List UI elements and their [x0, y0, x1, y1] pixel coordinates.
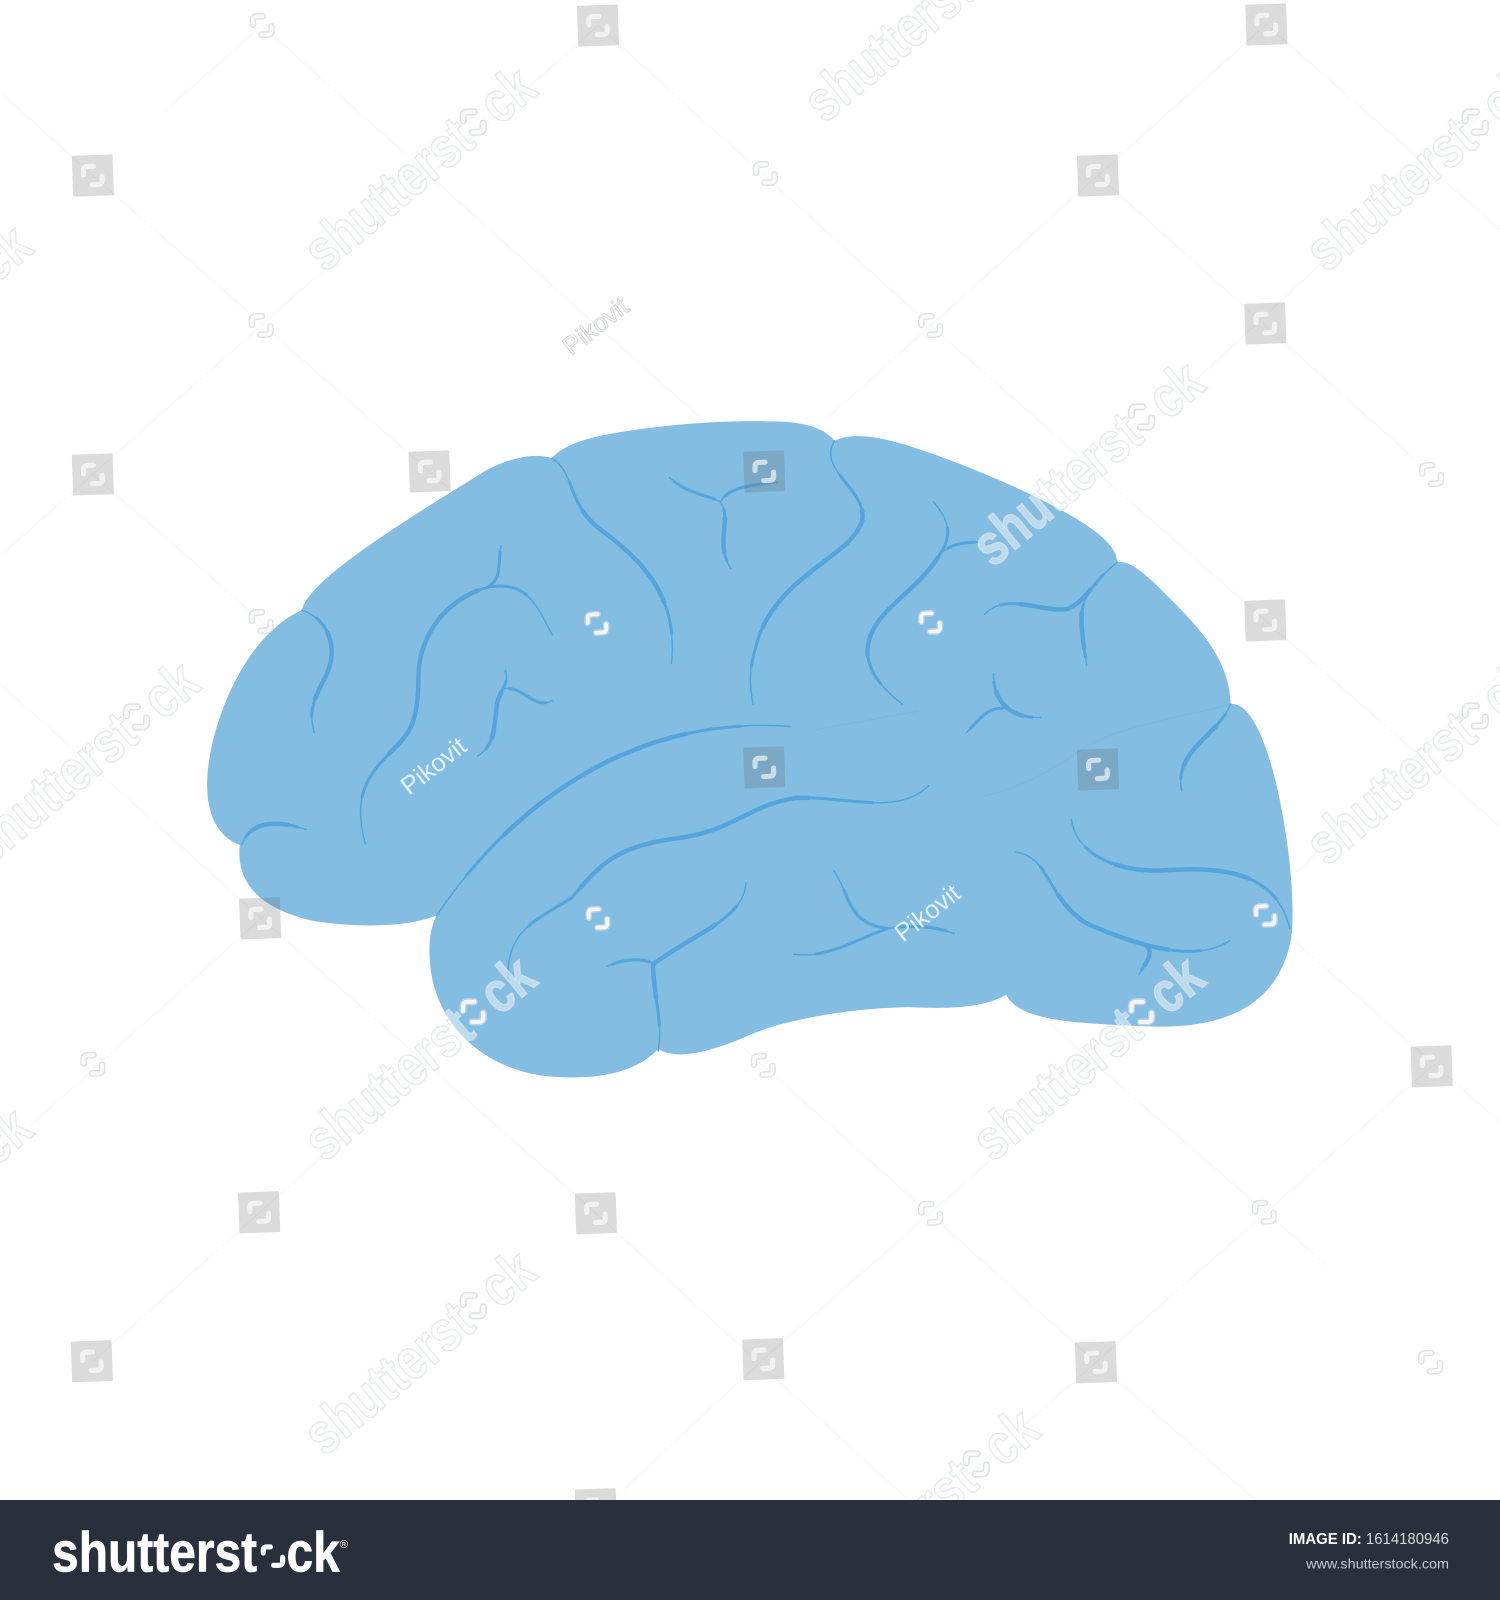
brain silhouette — [207, 421, 1293, 1077]
faint sulci — [816, 704, 1231, 796]
central sulci — [552, 441, 863, 704]
watermark author names: Pikovit — [890, 879, 966, 948]
footer logo: ® — [340, 1539, 349, 1551]
footer bar — [0, 1500, 1500, 1600]
temporal lobe sulci — [437, 725, 1290, 1051]
watermark wordmarks: shutterstock — [959, 943, 1217, 1173]
watermark wordmarks: shutterstock — [291, 943, 548, 1173]
image id: IMAGE ID: 1614180946 — [1289, 1531, 1449, 1548]
watermark author names: Pikovit — [558, 293, 634, 361]
watermark wordmarks: shutterstock — [291, 53, 548, 283]
watermark wordmarks: shutterstock — [291, 1237, 548, 1467]
website url: www.shutterstock.com — [1305, 1556, 1449, 1572]
watermark author names — [396, 293, 966, 948]
parietal and occipital sulci — [867, 502, 1231, 791]
footer logo: shutterstock — [52, 1520, 340, 1583]
watermark outline icons — [83, 16, 1441, 1372]
watermark author names: Pikovit — [396, 732, 472, 801]
frontal lobe sulci — [242, 546, 552, 845]
brain illustration — [207, 421, 1293, 1077]
watermark wordmarks: shutterstock — [959, 348, 1217, 578]
